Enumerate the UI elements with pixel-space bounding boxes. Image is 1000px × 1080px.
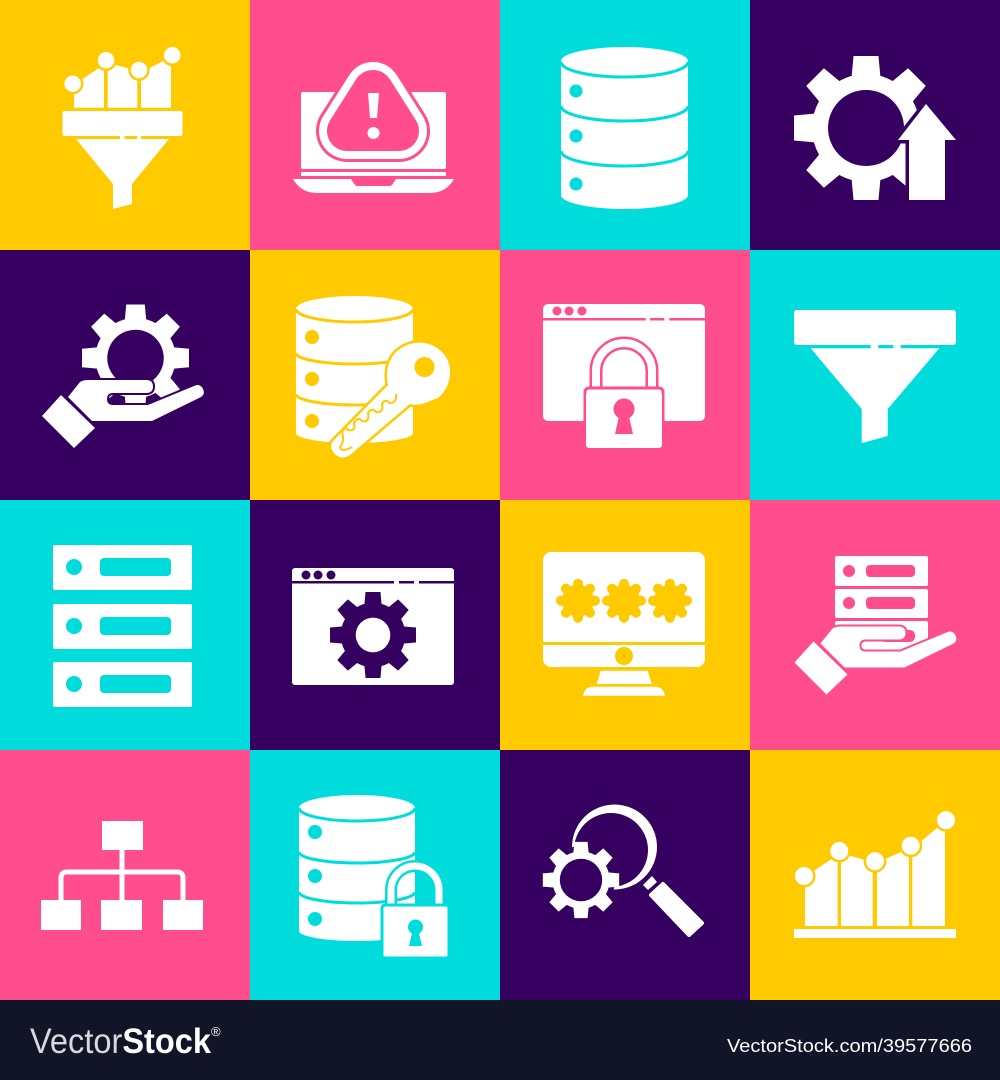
registered mark: ® — [211, 1024, 221, 1039]
panel: funnel with chart — [0, 0, 250, 250]
panel: database with key — [250, 250, 500, 500]
panel: hierarchy — [0, 750, 250, 1000]
image id url: VectorStock.com/39577666 — [727, 1036, 972, 1056]
panel: funnel — [750, 250, 1000, 500]
icon: browser window with gear — [292, 568, 454, 685]
panel: hand holding servers — [750, 500, 1000, 750]
icon: hierarchy chart — [41, 821, 203, 930]
panel: database with padlock — [250, 750, 500, 1000]
icon: database cylinder — [561, 47, 688, 209]
icon: browser window with padlock — [543, 304, 705, 448]
panel: magnifier with gear — [500, 750, 750, 1000]
icon: magnifying glass with gear — [543, 805, 702, 935]
panel: laptop with warning — [250, 0, 500, 250]
panel: hand holding gear — [0, 250, 250, 500]
icon: funnel — [794, 310, 956, 443]
brand wordmark: VectorStock — [30, 1022, 211, 1061]
panel: monitor with password — [500, 500, 750, 750]
icon: laptop with warning triangle — [293, 90, 454, 193]
icon: monitor with password asterisks — [543, 552, 705, 696]
panel: gear with up arrow — [750, 0, 1000, 250]
icon: gear with up arrow — [794, 56, 956, 200]
icon: database with key — [296, 296, 450, 458]
panel: growth chart — [750, 750, 1000, 1000]
panel: browser with padlock — [500, 250, 750, 500]
icon: growth chart — [794, 810, 956, 938]
footer bar — [0, 1000, 1000, 1080]
icon: database with padlock — [299, 795, 449, 958]
icon: hand holding server racks — [794, 556, 956, 694]
icon: funnel with chart — [62, 46, 182, 209]
icon: hand holding gear — [42, 305, 204, 448]
icon: server racks — [53, 545, 192, 707]
panel: server racks — [0, 500, 250, 750]
panel: database — [500, 0, 750, 250]
panel: browser with gear — [250, 500, 500, 750]
